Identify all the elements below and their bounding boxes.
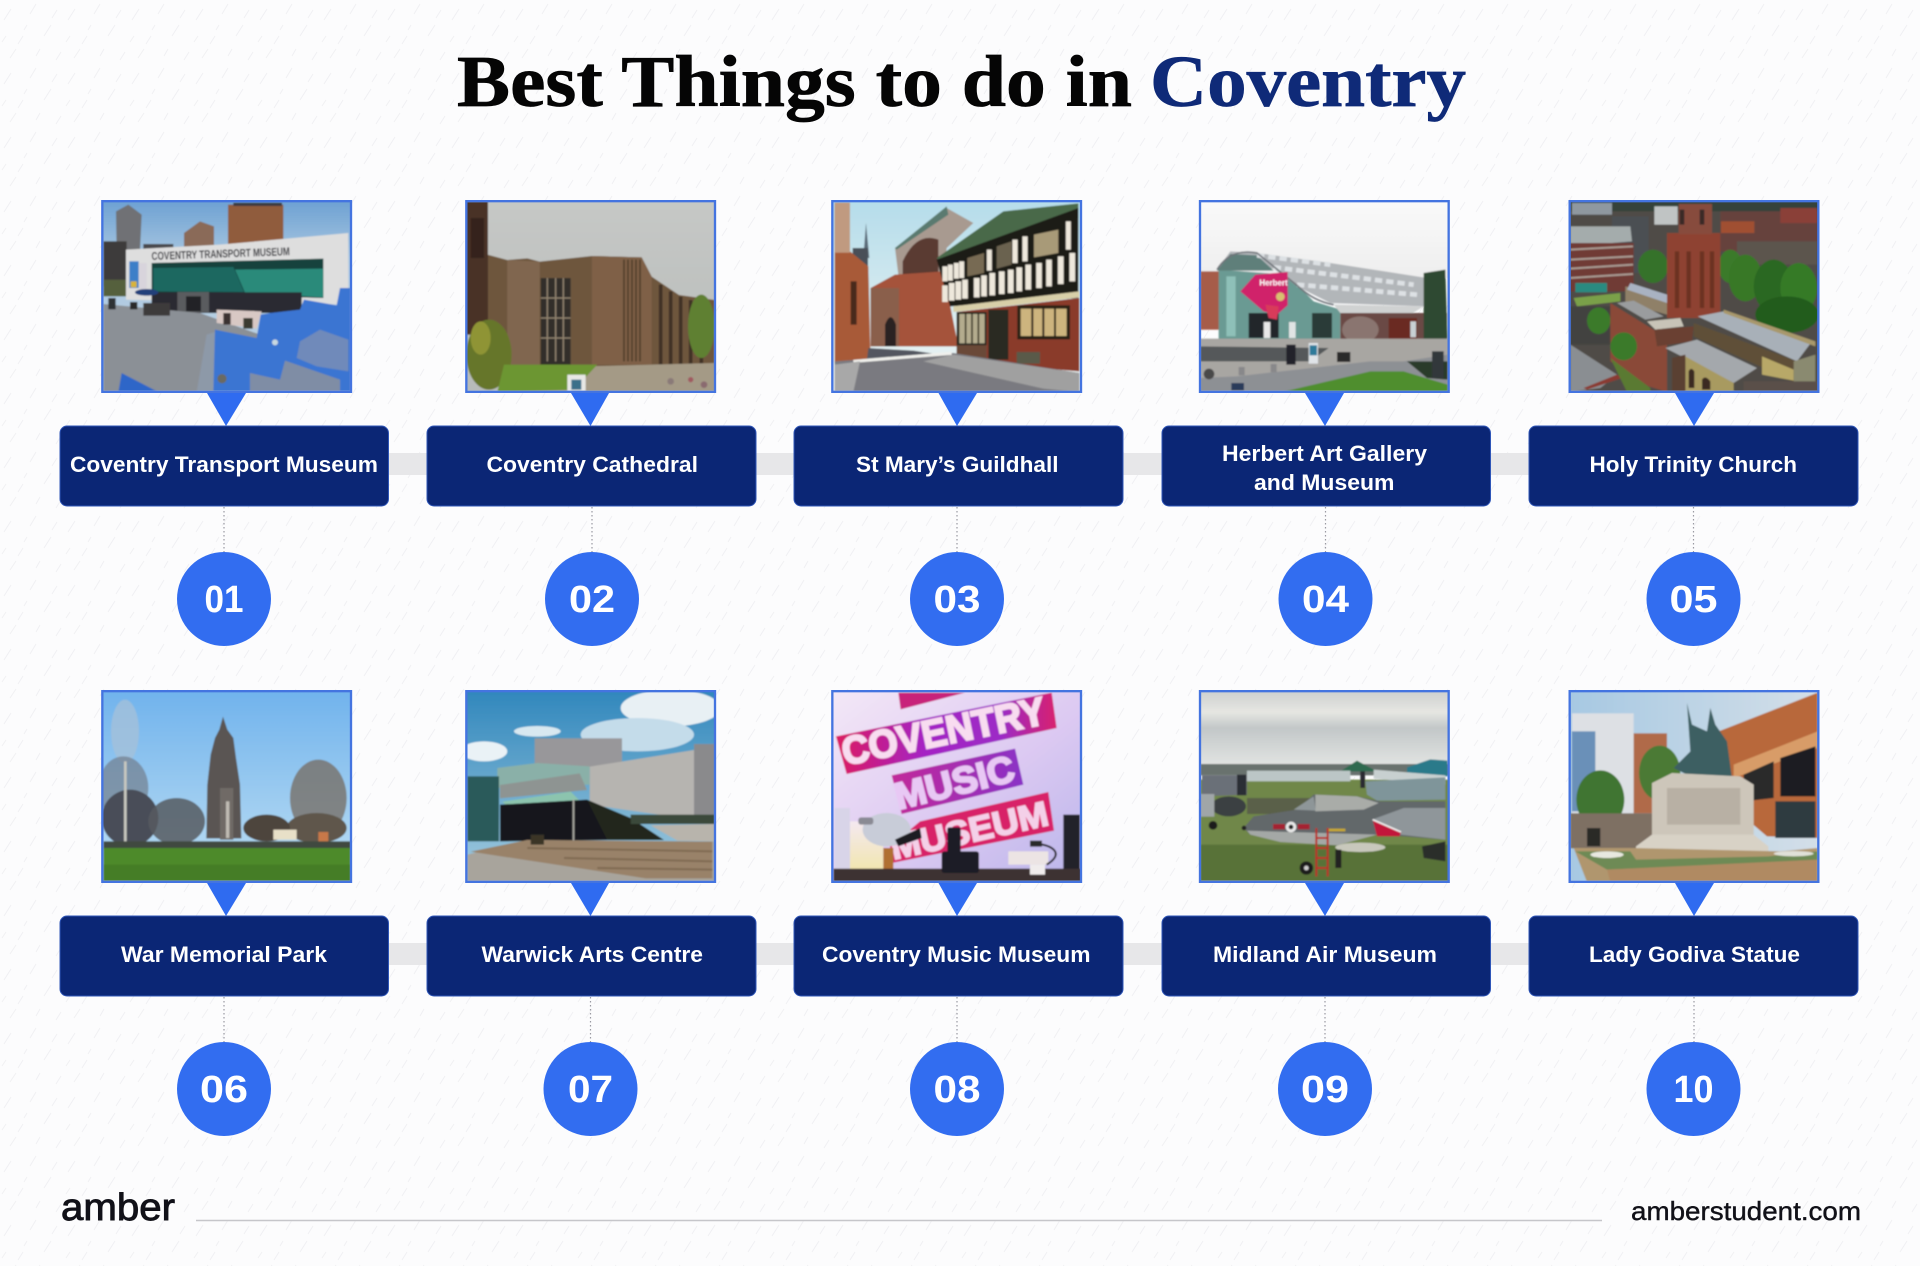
label text: Coventry Music Museum [822,942,1090,967]
label text [1222,441,1428,495]
label text: St Mary’s Guildhall [856,452,1058,477]
footer website: amberstudent.com [1631,1196,1861,1226]
number badge: 04 [1302,579,1349,621]
pointer triangle [1305,393,1344,426]
number badge [1646,552,1740,646]
card 08: Coventry Music Museum [794,688,1123,1136]
pointer triangle [207,393,246,426]
label text: Coventry Cathedral [486,452,698,477]
label text: Coventry Transport Museum [70,452,378,477]
dotted connector [956,507,958,552]
connector bar: row 2 [385,943,1535,965]
number badge [910,552,1004,646]
pointer triangle [1675,883,1714,916]
footer logo: amber: amber [61,1187,175,1229]
footer rule [196,1220,1602,1222]
photo: Coventry Music Museum [831,690,1082,883]
label box [1162,426,1490,506]
dotted connector [1324,507,1326,552]
dotted connector [223,507,225,552]
title [457,41,1466,122]
card 02: Coventry Cathedral [427,198,756,646]
label text: Lady Godiva Statue [1589,942,1800,967]
photo: Holy Trinity Church [1568,200,1820,393]
label box [60,916,388,996]
number badge [545,552,639,646]
label text: Herbert Art Gallery [1222,441,1428,466]
pointer triangle [1675,393,1714,426]
pointer triangle [938,393,977,426]
pointer triangle [571,393,609,426]
number badge: 10 [1674,1069,1714,1111]
title: Coventry [1150,41,1466,122]
photo: War Memorial Park [101,690,352,883]
photo: Herbert Art Gallery: Herbert [1259,277,1288,287]
card 10: Lady Godiva Statue [1529,688,1858,1136]
dotted connector [591,507,593,552]
number badge: 08 [934,1069,980,1111]
number badge: 07 [568,1069,613,1111]
number badge [910,1042,1004,1136]
dotted connector [223,997,225,1042]
photo: Coventry Transport Museum [101,200,352,393]
label box [1529,426,1858,506]
label box [794,426,1123,506]
label text: War Memorial Park [121,942,328,967]
dotted connector [956,997,958,1042]
photo: Midland Air Museum [1198,690,1450,883]
label text: and Museum [1254,470,1394,495]
card 03: St Mary's Guildhall [794,198,1123,646]
number badge [177,552,271,646]
photo: Coventry Music Museum: MUSEUM [887,795,1052,867]
dotted connector [1692,507,1694,552]
number badge: 03 [934,579,980,621]
number badge: 01 [204,579,244,621]
card 09: Midland Air Museum [1162,688,1490,1136]
dotted connector [1693,997,1695,1042]
label text: Midland Air Museum [1213,942,1437,967]
title: Best Things to do in [457,41,1132,122]
photo: Herbert Art Gallery [1198,200,1450,393]
number badge: 09 [1301,1069,1349,1111]
card 06: War Memorial Park [60,688,388,1136]
label box [794,916,1123,996]
card 05: Holy Trinity Church [1529,198,1858,646]
number badge [1278,552,1372,646]
label box [427,916,756,996]
number badge [544,1042,638,1136]
photo: Coventry Transport Museum: COVENTRY TRANSPORT MUSEUM [151,246,290,263]
card 01: Coventry Transport Museum [60,198,388,646]
label box [60,426,388,506]
pointer triangle [207,883,246,916]
number badge [1278,1042,1372,1136]
label text: Warwick Arts Centre [482,942,703,967]
label box [427,426,756,506]
photo: Warwick Arts Centre [465,690,716,883]
photo: Lady Godiva Statue [1568,690,1820,883]
card 04: Herbert Art Gallery and Museum [1162,198,1490,646]
photo: Coventry Music Museum: MUSIC [890,747,1019,817]
connector bar: row 1 [385,453,1535,475]
number badge [1646,1042,1740,1136]
pointer triangle [571,883,609,916]
pointer triangle [1305,883,1344,916]
number badge: 06 [200,1069,248,1111]
card 07: Warwick Arts Centre [427,688,756,1136]
photo: Coventry Music Museum: COVENTRY [838,689,1049,774]
label box [1162,916,1490,996]
pointer triangle [938,883,977,916]
number badge [177,1042,271,1136]
photo: St Mary's Guildhall [831,200,1082,393]
photo: Coventry Cathedral [465,200,716,393]
label box [1529,916,1858,996]
dotted connector [590,997,592,1042]
label text: Holy Trinity Church [1590,452,1797,477]
number badge: 02 [569,579,615,621]
number badge: 05 [1670,579,1718,621]
dotted connector [1324,997,1326,1042]
